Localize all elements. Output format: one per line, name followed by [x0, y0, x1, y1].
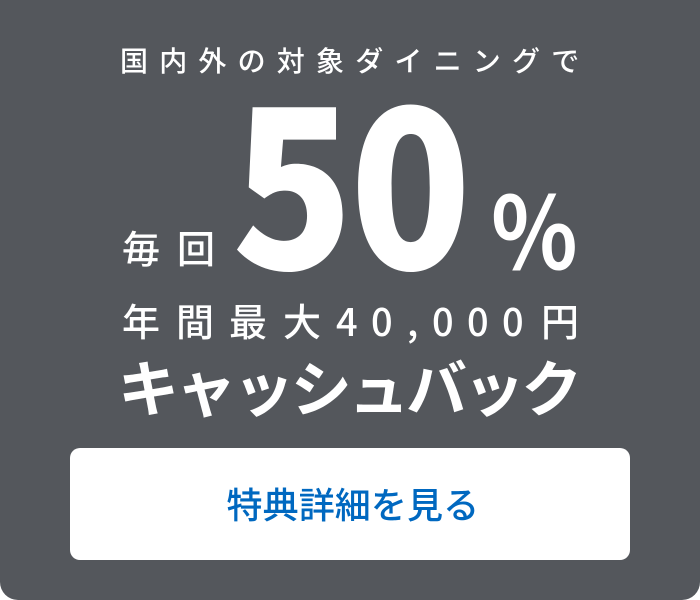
- annual maximum amount: 年間最大40,000円: [122, 292, 579, 347]
- button label: 特典詳細を見る: [226, 477, 479, 529]
- label: every time: 毎回: [122, 219, 232, 274]
- button: view benefit details: [70, 448, 630, 560]
- percent sign: %: [491, 154, 578, 298]
- heading: cashback: キャッシュバック: [118, 340, 579, 429]
- big number: 50: 50: [232, 18, 468, 332]
- heading: eligible dining: 国内外の対象ダイニングで: [120, 40, 590, 80]
